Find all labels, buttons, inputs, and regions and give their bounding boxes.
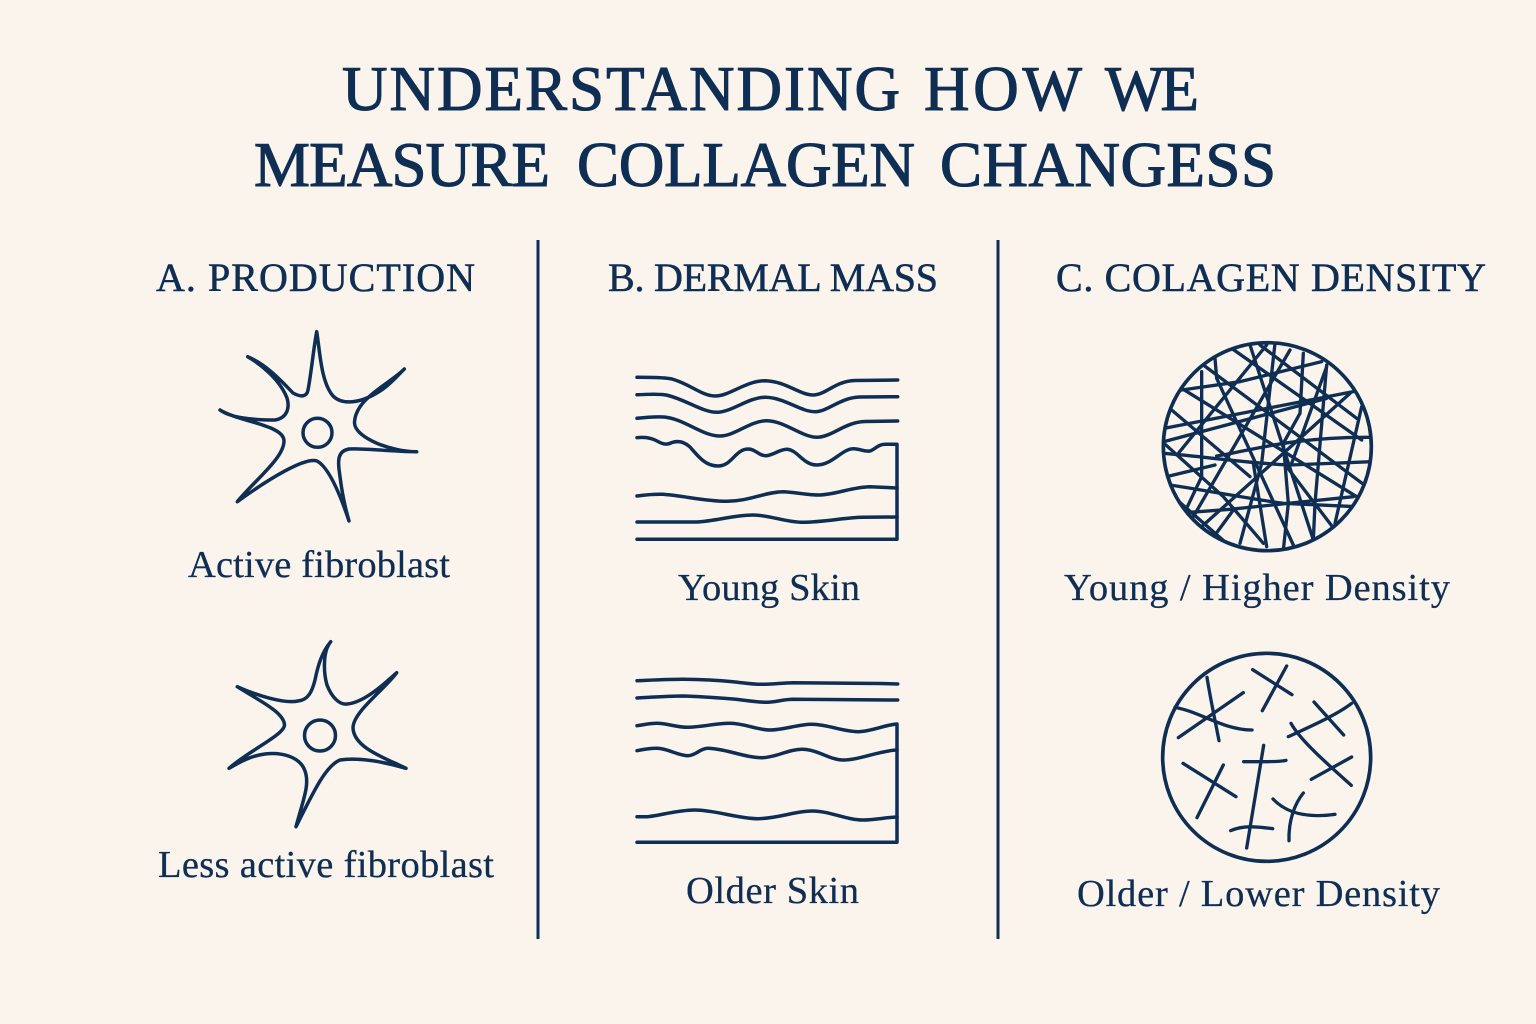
title: HOW <box>924 54 1083 124</box>
panel: A. Production <box>156 255 494 886</box>
title <box>254 54 1276 200</box>
heading: A. Production: A. PRODUCTION <box>156 255 475 300</box>
label: young higher density: Young / Higher Density <box>1064 567 1451 609</box>
label: young skin: Young Skin <box>678 567 860 609</box>
title: UNDERSTANDING <box>342 54 900 124</box>
title: CHANGESS <box>940 130 1276 200</box>
heading: C. Colagen Density: C. COLAGEN DENSITY <box>1056 255 1486 300</box>
icon: sparse collagen network <box>1163 653 1371 861</box>
icon: less active fibroblast <box>229 642 406 827</box>
title: COLLAGEN <box>577 130 915 200</box>
label: older lower density: Older / Lower Density <box>1077 873 1441 915</box>
label: active fibroblast: Active fibroblast <box>188 544 450 586</box>
panel: C. Colagen Density <box>1056 255 1486 915</box>
label: older skin: Older Skin <box>686 870 859 912</box>
panel: B. Dermal Mass <box>608 255 938 912</box>
label: less active fibroblast: Less active fibroblast <box>158 844 494 886</box>
diagram: older skin layers <box>637 679 898 842</box>
title: MEASURE <box>254 130 550 200</box>
title: WE <box>1105 54 1199 124</box>
icon: dense collagen network <box>1163 343 1372 551</box>
heading: B. Dermal Mass: B. DERMAL MASS <box>608 255 938 300</box>
icon: active fibroblast <box>220 332 417 521</box>
diagram: young skin layers <box>637 377 898 539</box>
